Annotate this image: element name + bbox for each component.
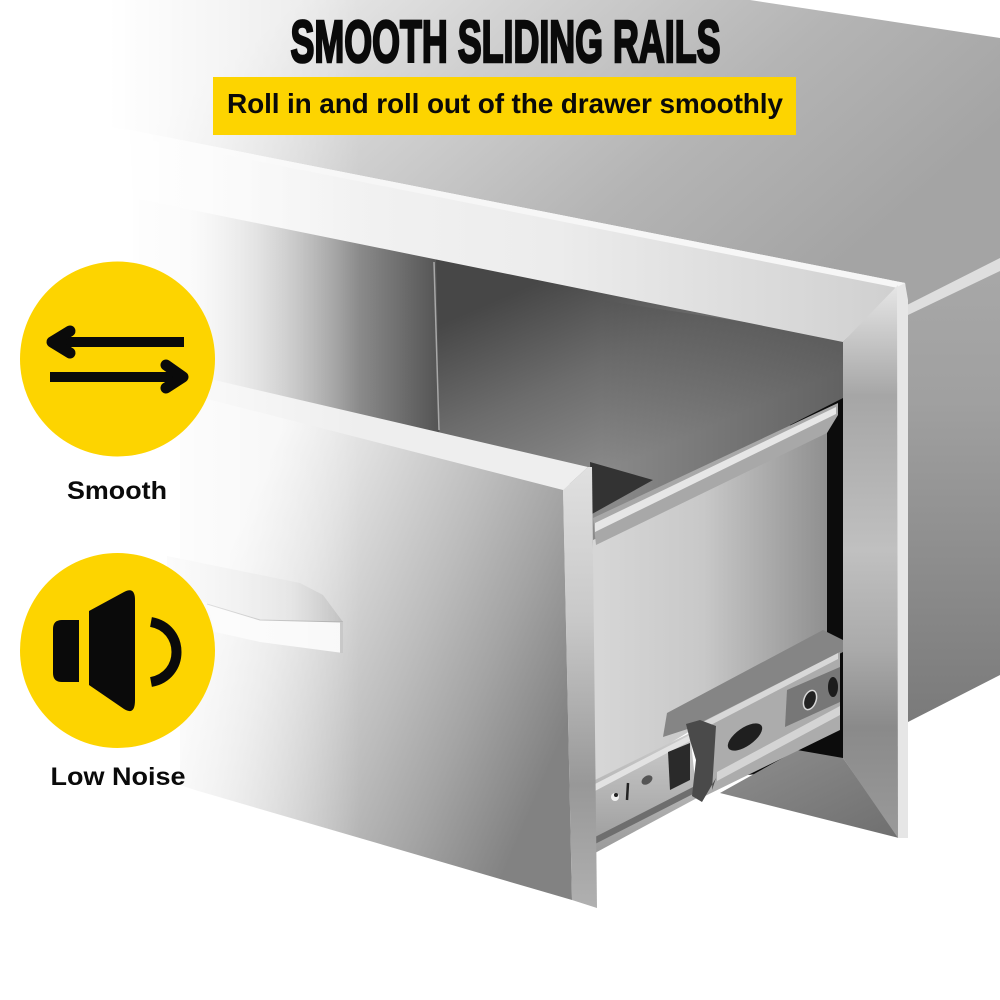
subtitle banner <box>213 77 796 135</box>
slide hole <box>801 689 819 711</box>
outer rail lower channel <box>595 787 695 844</box>
rail gusset <box>663 630 843 737</box>
handle <box>167 556 343 653</box>
inner rail highlight top <box>703 653 838 729</box>
opening back wall <box>435 255 850 700</box>
outer rail top lip <box>595 735 690 791</box>
inner rail highlight bottom <box>717 706 840 781</box>
drawer front top lip <box>180 372 588 490</box>
left white fade <box>0 0 360 1000</box>
inner rail dark panel <box>785 667 840 727</box>
slide slot <box>723 718 767 756</box>
housing ridge highlight <box>907 258 1000 315</box>
rail highlight <box>595 407 836 532</box>
drawer front <box>180 385 572 900</box>
slide rail outer <box>595 733 697 853</box>
frame shadow <box>700 398 843 780</box>
label: low noise: Low Noise <box>50 763 186 791</box>
wall seam <box>434 262 439 430</box>
frame bottom band <box>720 750 899 838</box>
drawer top rail <box>593 403 838 545</box>
icon: low noise speaker <box>20 553 215 748</box>
rail recess <box>668 743 690 790</box>
housing right side <box>905 262 1000 722</box>
slide hole small <box>828 677 838 697</box>
subtitle banner: Roll in and roll out of the drawer smoothly <box>227 88 783 119</box>
frame right band <box>843 285 898 838</box>
drawer side panel <box>593 430 827 790</box>
icon: smooth arrows <box>20 262 215 456</box>
back wall right shade <box>600 300 850 500</box>
label: smooth: Smooth <box>67 477 167 505</box>
opening left wall <box>133 195 440 445</box>
frame top band highlight <box>130 130 905 288</box>
slide clip <box>686 720 716 802</box>
slide rail inner <box>700 652 840 797</box>
title: SMOOTH SLIDING RAILS <box>290 9 720 75</box>
drawer inner cavity <box>590 462 653 514</box>
frame top band <box>130 130 905 342</box>
housing top surface <box>0 0 1000 308</box>
drawer front right edge <box>563 467 597 908</box>
rail holes <box>611 773 654 801</box>
frame white edge <box>897 283 908 838</box>
